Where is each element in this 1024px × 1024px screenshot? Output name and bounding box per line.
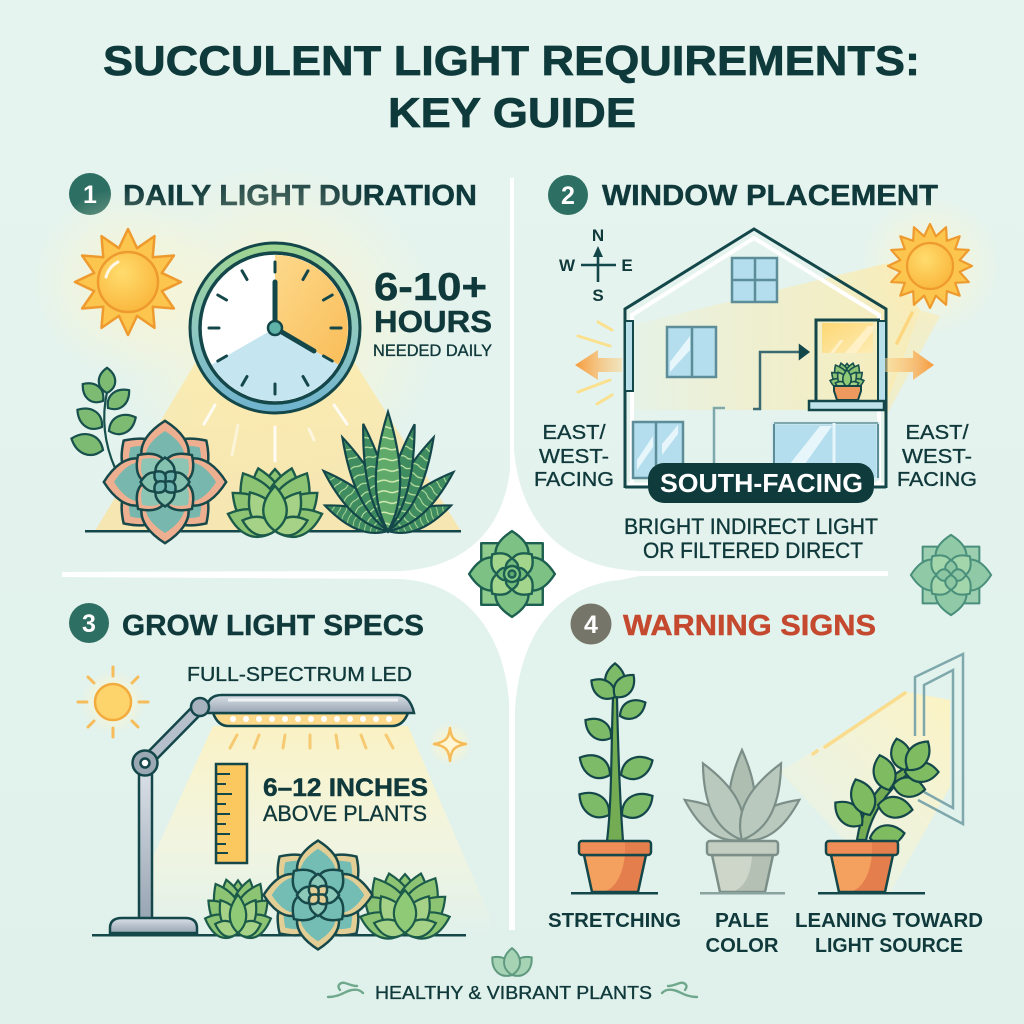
icon: compass: S — [592, 286, 604, 305]
plant: teal rosette — [264, 841, 372, 949]
pale leaves — [678, 750, 806, 850]
plant: pale colour — [678, 750, 806, 894]
light cone — [153, 726, 490, 933]
heading: warning signs — [570, 604, 876, 644]
footer text: HEALTHY & VIBRANT PLANTS — [375, 982, 652, 1003]
caption: window light: OR FILTERED DIRECT — [643, 538, 863, 563]
badge: south-facing: SOUTH-FACING — [660, 468, 863, 498]
icon: clock — [190, 243, 360, 413]
ground line — [92, 934, 466, 936]
icon: footer leaves — [487, 948, 537, 981]
stat: 6-12 inches: ABOVE PLANTS — [263, 801, 427, 826]
plant: green rosette — [223, 464, 327, 543]
south-facing window with plant — [809, 320, 884, 410]
icon: sun — [75, 229, 181, 335]
icon: compass: N — [592, 226, 604, 245]
label: east/west-facing left: WEST- — [539, 446, 609, 468]
label: east/west-facing right: WEST- — [902, 446, 972, 468]
heading: grow light specs — [69, 603, 424, 643]
sun glow and light beam — [633, 196, 1000, 420]
heading: warning signs: 4 — [584, 611, 598, 639]
icon: small sun — [78, 667, 148, 737]
ground line — [571, 892, 658, 894]
light beam from window — [780, 692, 950, 893]
label: east/west-facing left: FACING — [534, 469, 614, 491]
beam highlight — [813, 693, 905, 754]
footer squiggles — [328, 983, 697, 997]
stat: 6-12 inches: 6–12 INCHES — [263, 774, 428, 802]
icon: window frame — [915, 654, 963, 824]
badge: south-facing — [648, 463, 874, 503]
sunlight glow and beam — [33, 165, 461, 531]
stat: 6-12 inches — [263, 774, 428, 826]
icon: compass: E — [621, 256, 633, 275]
heading: grow light specs: 3 — [82, 610, 96, 638]
heading: window placement — [548, 175, 938, 215]
panel: daily light duration — [33, 165, 492, 543]
stat: 6-10+ hours — [373, 266, 492, 360]
title: SUCCULENT LIGHT REQUIREMENTS: — [103, 37, 920, 84]
stem and leaves — [573, 663, 658, 841]
label: east/west-facing left — [534, 422, 614, 491]
pale pot — [707, 841, 778, 892]
panel: warning signs — [548, 604, 983, 957]
stem and leaves — [829, 736, 939, 848]
icon: sun — [888, 224, 972, 308]
title: KEY GUIDE — [388, 89, 636, 136]
label: pale color: PALE — [715, 910, 769, 932]
lamp rays — [230, 735, 393, 748]
title — [103, 37, 920, 136]
heading: window placement: 2 — [561, 182, 575, 210]
label: leaning toward light source — [795, 910, 983, 957]
footer — [328, 948, 697, 1003]
ground line — [700, 892, 785, 894]
ground line — [85, 530, 461, 532]
label: stretching: STRETCHING — [548, 910, 681, 932]
label: east/west-facing right — [897, 422, 977, 491]
plant: stretching — [571, 663, 658, 894]
pot — [826, 841, 898, 892]
label: leaning toward light source: LEANING TOWARD — [795, 910, 983, 932]
icon: ruler — [216, 764, 247, 863]
side windows — [625, 321, 886, 401]
icon: compass: W — [559, 256, 576, 275]
label: east/west-facing right: EAST/ — [906, 422, 969, 444]
panel: window placement — [534, 175, 1000, 563]
plant: leafy sprig — [68, 368, 140, 468]
label: east/west-facing left: EAST/ — [542, 422, 606, 444]
label: pale color — [706, 910, 779, 957]
icon: centre succulent medallion — [468, 530, 556, 618]
panel: grow light specs — [69, 603, 490, 949]
label: pale color: COLOR — [706, 935, 779, 957]
arrows: light direction — [575, 322, 934, 404]
plant: left green rosette — [201, 876, 275, 943]
icon: grow lamp — [110, 695, 414, 933]
label: east/west-facing right: FACING — [897, 469, 977, 491]
icon: sparkle — [428, 722, 472, 766]
heading: grow light specs: GROW LIGHT SPECS — [122, 610, 424, 642]
label: full-spectrum led: FULL-SPECTRUM LED — [187, 663, 412, 686]
label: leaning toward light source: LIGHT SOURCE — [815, 935, 963, 957]
heading: daily light duration — [69, 173, 477, 215]
plant: right green rosette — [355, 869, 455, 945]
stat: 6-10+ hours: HOURS — [374, 304, 492, 339]
heading: daily light duration: DAILY LIGHT DURATION — [123, 180, 477, 212]
icon: compass — [559, 226, 633, 305]
icon: right succulent — [910, 534, 992, 616]
pot — [579, 841, 651, 892]
caption: window light: BRIGHT INDIRECT LIGHT — [624, 514, 878, 539]
plant: leaning toward light — [818, 736, 939, 894]
white cross divider — [62, 178, 888, 930]
plant: striped aloe — [317, 412, 460, 540]
heading: window placement: WINDOW PLACEMENT — [602, 180, 938, 212]
heading: daily light duration: 1 — [83, 181, 97, 209]
stat: 6-10+ hours: 6-10+ — [374, 266, 487, 309]
ground line — [818, 892, 925, 894]
house windows — [633, 258, 878, 479]
house outline — [625, 229, 886, 488]
interior path arrow — [714, 346, 808, 463]
stat: 6-10+ hours: NEEDED DAILY — [373, 342, 492, 360]
heading: warning signs: WARNING SIGNS — [623, 610, 876, 642]
caption: window light — [624, 514, 878, 563]
plant: echeveria rosette — [104, 421, 226, 543]
